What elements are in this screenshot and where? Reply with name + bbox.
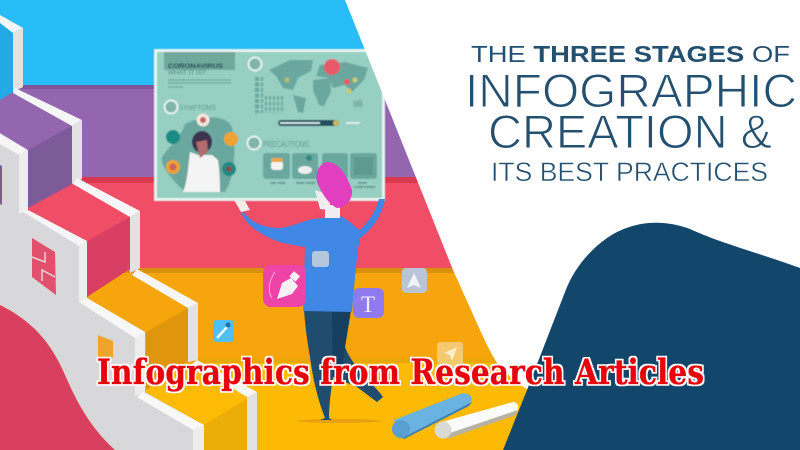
isometric staircase xyxy=(0,15,257,450)
person xyxy=(234,162,385,423)
heading line 2: INFOGRAPHIC xyxy=(465,64,797,117)
poster: coronavirus infographic xyxy=(154,49,385,201)
heading line 1: THE THREE STAGES OF xyxy=(471,41,790,67)
white right panel xyxy=(345,0,800,450)
symptoms section xyxy=(162,100,238,192)
curved red base xyxy=(0,305,115,450)
precautions section: social contact xyxy=(354,185,375,189)
precautions section: Avoid xyxy=(358,181,367,185)
poster heading: WHAT IT IS? xyxy=(168,70,207,76)
precautions section: Use mask xyxy=(270,181,286,185)
legs xyxy=(304,310,383,420)
precautions section: PRECAUTIONS xyxy=(263,139,309,149)
pink hair xyxy=(316,162,352,208)
icon: arrow orange xyxy=(437,342,463,367)
world map xyxy=(248,58,368,113)
precautions section xyxy=(248,136,377,189)
icon: pen tool xyxy=(263,265,306,307)
blue step xyxy=(0,15,23,100)
yellow step xyxy=(137,360,257,450)
heading line 4: ITS BEST PRACTICES xyxy=(491,157,768,187)
icon: arrow grey xyxy=(402,268,427,293)
icon: text T xyxy=(353,288,384,318)
overlay title: Infographics from Research Articles xyxy=(97,352,704,393)
poster heading: CORONAVIRUS xyxy=(168,63,223,70)
background colour bands xyxy=(0,0,540,450)
rolled paper: white xyxy=(434,402,518,439)
people pictogram xyxy=(256,77,282,113)
icon: text T: T xyxy=(361,292,375,317)
rolled paper: blue xyxy=(392,393,472,439)
heading: three stages of infographic creation xyxy=(465,41,797,187)
heading line 3: CREATION & xyxy=(488,105,772,158)
poster heading xyxy=(164,52,235,87)
hand and neck xyxy=(234,200,250,212)
progress bar xyxy=(278,120,360,126)
number 2 on stair xyxy=(32,238,56,295)
red step xyxy=(20,178,140,302)
orange step xyxy=(79,269,198,396)
icon: eyedropper xyxy=(213,320,234,342)
precautions section: Wash hands xyxy=(296,181,316,185)
stair wall xyxy=(0,130,204,450)
arm and torso xyxy=(242,199,385,312)
purple step xyxy=(0,88,82,214)
symptoms section: SYMPTOMS xyxy=(179,103,216,112)
navy corner shape xyxy=(503,223,800,450)
icon: small square xyxy=(312,251,329,267)
shadow xyxy=(297,419,381,423)
woman coughing xyxy=(183,131,220,192)
